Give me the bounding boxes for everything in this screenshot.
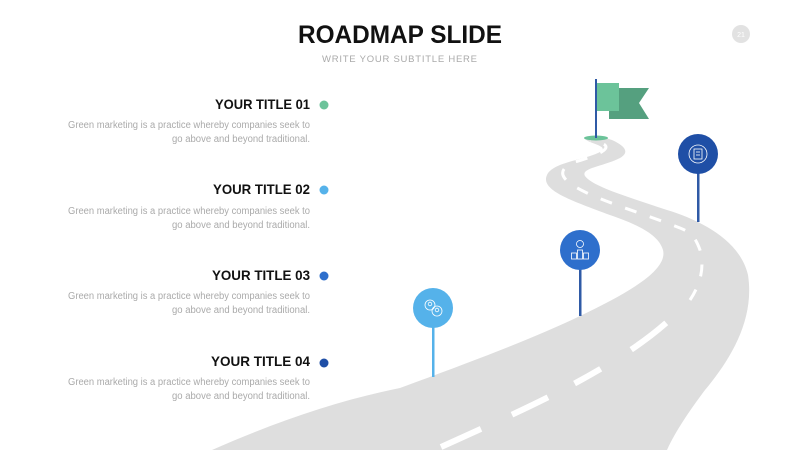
pin 3: document network icon — [678, 134, 718, 222]
item 03 — [68, 267, 328, 316]
page number badge: 21 — [737, 32, 745, 39]
item 04: go above and beyond traditional. — [172, 391, 310, 402]
item 02 — [68, 181, 328, 231]
item 03: go above and beyond traditional. — [172, 305, 310, 316]
item 03: YOUR TITLE 03 — [212, 267, 310, 283]
item 01: go above and beyond traditional. — [172, 134, 310, 145]
item 02: Green marketing is a practice whereby companies seek to — [68, 206, 310, 217]
item 01: Green marketing is a practice whereby companies seek to — [68, 120, 310, 131]
item 04: YOUR TITLE 04 — [211, 353, 310, 369]
item 02: YOUR TITLE 02 — [213, 181, 310, 197]
page number badge — [732, 25, 750, 43]
subtitle: WRITE YOUR SUBTITLE HERE — [322, 54, 477, 65]
item 01: YOUR TITLE 01 — [215, 96, 310, 112]
item 04: Green marketing is a practice whereby companies seek to — [68, 377, 310, 388]
pin 2: money podium icon — [560, 230, 600, 316]
item 01 — [68, 96, 328, 145]
item 03: Green marketing is a practice whereby companies seek to — [68, 291, 310, 302]
pin 1: people icon — [413, 288, 453, 377]
road — [212, 137, 749, 450]
item 02: go above and beyond traditional. — [172, 220, 310, 231]
item 04 — [68, 353, 328, 402]
flag — [584, 79, 649, 140]
title: ROADMAP SLIDE — [298, 21, 502, 49]
